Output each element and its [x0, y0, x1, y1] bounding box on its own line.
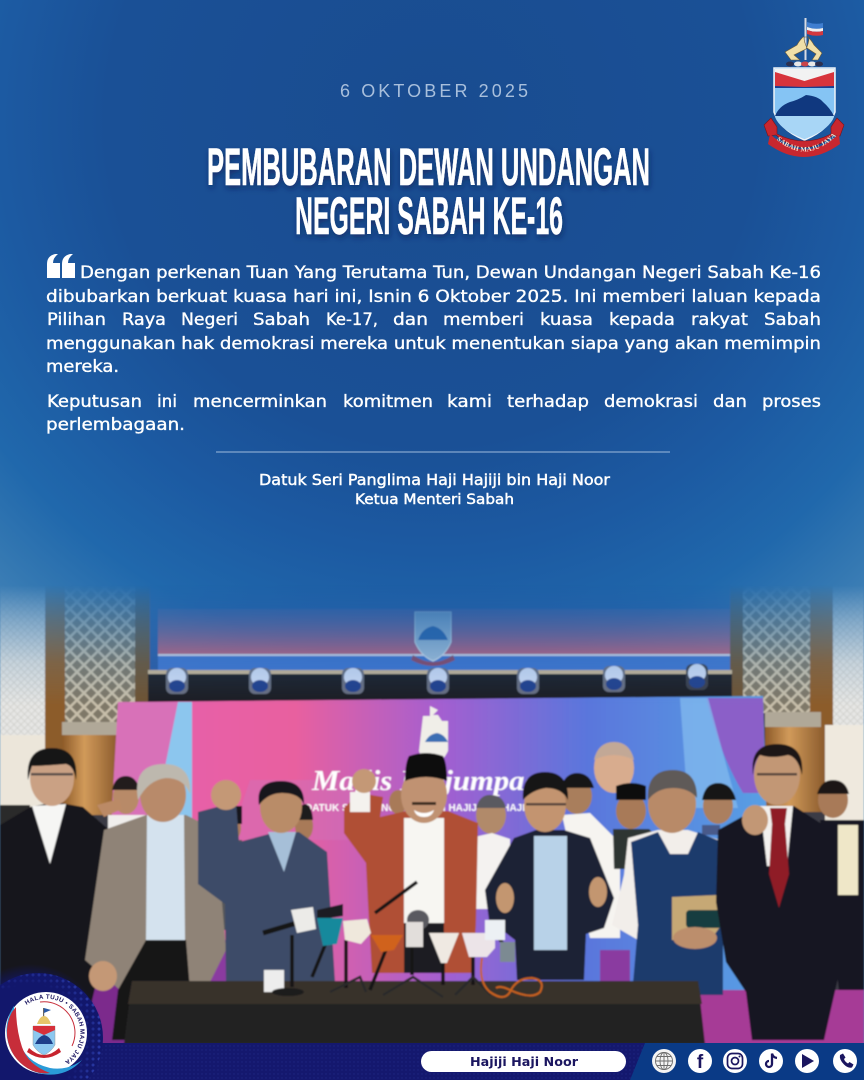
photo: press conference group: [0, 585, 864, 1045]
wreath: [786, 62, 823, 66]
statement paragraph: rakyat: [691, 310, 749, 329]
statement paragraph: kuasa: [540, 310, 593, 329]
logo badge: Hala Tuju Sabah Maju Jaya: HALA TUJU • SABAH MAJU JAYA: [24, 994, 85, 1064]
second paragraph: terhadap: [507, 392, 589, 411]
statement paragraph: kepada: [609, 310, 675, 329]
signature: Ketua Menteri Sabah: [355, 492, 514, 508]
person 2: elder in houndstooth jacket: [85, 764, 226, 1040]
icon: website globe: [652, 1049, 676, 1073]
mini state crest: [27, 1008, 61, 1058]
second paragraph: proses: [762, 392, 821, 411]
social icons panel: [630, 1043, 864, 1080]
statement paragraph: Ke-17,: [326, 310, 378, 329]
person 6: elder in navy vest holding folder: [619, 769, 724, 996]
hall wall and pillars: [0, 585, 864, 1015]
ceiling panel with crest: [148, 585, 732, 702]
table with black cloth: [124, 981, 705, 1044]
icon: phone: [833, 1049, 857, 1073]
icon: opening quotation mark: [47, 254, 75, 278]
bottom bar: [0, 1043, 864, 1080]
flag: [804, 18, 823, 60]
second paragraph: mencerminkan: [193, 392, 327, 411]
person 5: man in dark jacket, thumbs up: [485, 772, 614, 980]
icon: facebook: f: [697, 1052, 704, 1073]
name pill: Hajiji Haji Noor: [470, 1054, 579, 1069]
logo badge: Hala Tuju Sabah Maju Jaya: [0, 966, 103, 1078]
person 3: man in blue checked jacket raising fist: [198, 780, 335, 982]
name pill: [421, 1051, 626, 1072]
second paragraph: demokrasi: [604, 392, 698, 411]
statement paragraph: dan: [393, 310, 428, 329]
person 1: man in black suit: [0, 748, 108, 1009]
statement paragraph: Negeri: [181, 310, 238, 329]
purple floor and skirting: [84, 940, 864, 1045]
statement paragraph: Pilihan: [47, 310, 106, 329]
person 4: centre man in songkok and terracotta jacket: [344, 753, 478, 973]
LED backdrop screen: [110, 696, 772, 1000]
title: [207, 138, 650, 246]
statement paragraph: [46, 263, 821, 376]
icon: youtube play: [795, 1049, 819, 1073]
title: NEGERI SABAH KE-16: [295, 187, 563, 246]
statement paragraph: Sabah: [764, 310, 821, 329]
icon: tiktok: [759, 1049, 783, 1073]
statement paragraph: Sabah: [253, 310, 310, 329]
divider: [216, 452, 670, 453]
state crest: Sabah Maju Jaya: [764, 18, 844, 157]
second paragraph: perlembagaan.: [46, 415, 185, 434]
person 7: tall man in dark suit with red tie: [716, 744, 844, 1040]
microphones: [263, 882, 542, 997]
second paragraph: kami: [447, 392, 492, 411]
date: 6 OKTOBER 2025: [340, 81, 528, 101]
ribbon with motto: SABAH MAJU JAYA: [776, 134, 836, 152]
second paragraph: ini: [157, 392, 177, 411]
icon: facebook: [688, 1049, 712, 1073]
statement paragraph: mereka.: [46, 357, 119, 376]
stage lights: [166, 664, 708, 694]
screen text: [306, 768, 528, 812]
icon: instagram: [723, 1049, 747, 1073]
statement paragraph: Dengan perkenan Tuan Yang Terutama Tun, Dewan Undangan Negeri Sabah Ke-16: [80, 263, 821, 282]
statement paragraph: dibubarkan berkuat kuasa hari ini, Isnin 6 Oktober 2025. Ini memberi laluan kepada: [46, 287, 821, 306]
arms holding pole: [785, 37, 822, 60]
screen text: DATUK SERI PANGLIMA HAJI HAJIJI BIN HAJI: [305, 803, 525, 814]
screen text: Majlis Perjumpaan: [311, 765, 557, 797]
second paragraph: dan: [713, 392, 747, 411]
background guests: [97, 773, 864, 1000]
signature: [259, 471, 611, 508]
second paragraph: Keputusan: [47, 392, 142, 411]
statement paragraph: Raya: [122, 310, 166, 329]
statement paragraph: memberi: [443, 310, 524, 329]
second paragraph: komitmen: [343, 392, 433, 411]
statement paragraph: menggunakan hak demokrasi mereka untuk menentukan siapa yang akan memimpin: [46, 334, 821, 353]
shield: [774, 68, 835, 140]
signature: Datuk Seri Panglima Haji Hajiji bin Haji Noor: [259, 471, 611, 489]
second paragraph: [46, 392, 821, 434]
portrait on screen: [594, 742, 634, 793]
